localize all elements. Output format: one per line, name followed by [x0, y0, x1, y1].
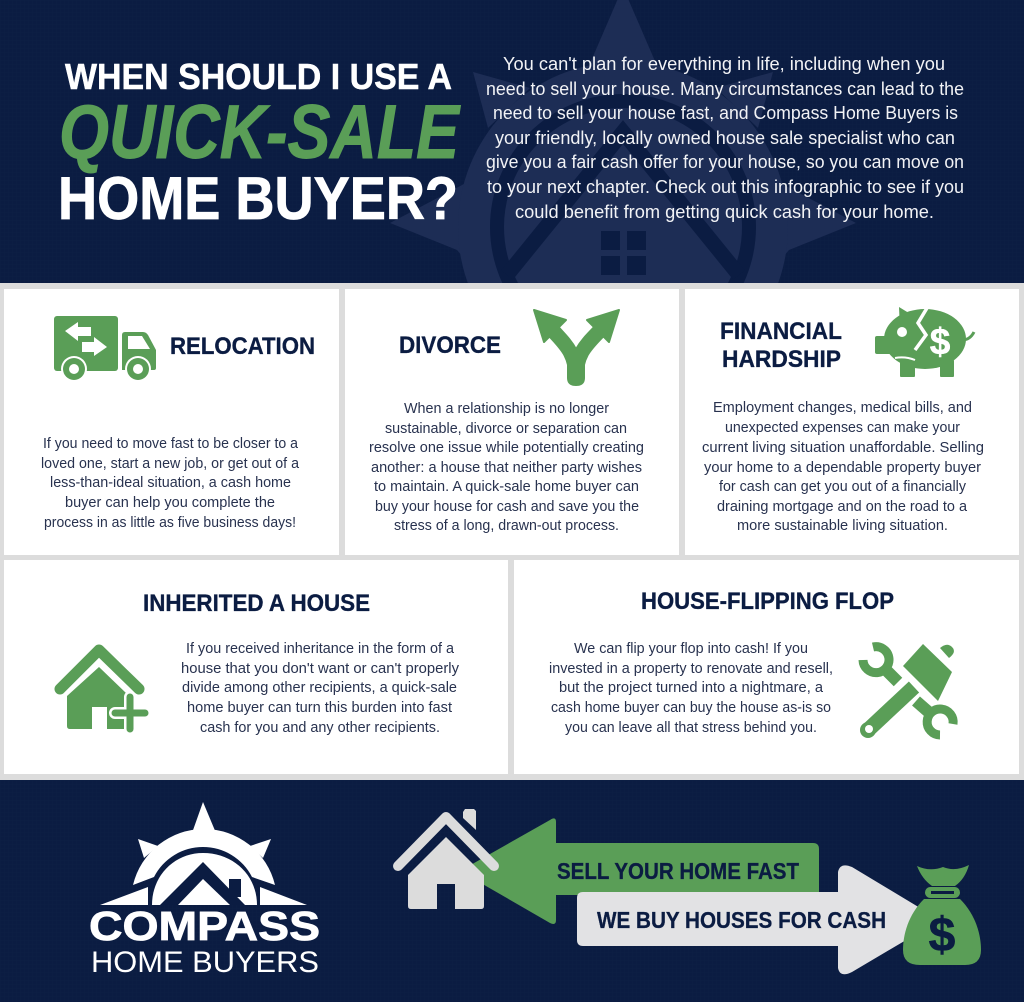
panel: relocation	[4, 289, 339, 555]
text: relocation: If you need to move fast to be closer to a	[43, 436, 299, 452]
icon: broken piggy bank	[875, 307, 974, 377]
text: relocation: process in as little as five business days!	[44, 515, 296, 531]
logo wordmark: HOME BUYERS	[91, 946, 319, 979]
text: house-flipping flop: We can flip your flop into cash! If you	[574, 641, 808, 657]
arrow: we buy houses for cash: WE BUY HOUSES FOR CASH	[597, 907, 886, 933]
text: divorce: stress of a long, drawn-out process.	[394, 518, 619, 534]
icon: money bag	[903, 865, 981, 965]
text: financial hardship	[702, 400, 984, 534]
heading: financial hardship: FINANCIAL	[720, 318, 842, 345]
title: HOME BUYER?	[58, 165, 458, 232]
text: divorce	[369, 401, 644, 534]
text: inherited a house: house that you don't want or can't properly	[181, 661, 460, 677]
text: inherited a house: If you received inheritance in the form of a	[186, 641, 455, 657]
title	[58, 56, 461, 232]
text: inherited a house: cash for you and any other recipients.	[200, 720, 440, 736]
intro paragraph: could benefit from getting quick cash for your home.	[515, 202, 934, 222]
text: inherited a house: divide among other recipients, a quick-sale	[182, 680, 457, 696]
text: inherited a house	[181, 641, 460, 736]
heading: financial hardship	[720, 318, 842, 373]
title: QUICK-SALE	[59, 90, 461, 175]
text: house-flipping flop: but the project turned into a nightmare, a	[559, 680, 824, 696]
heading: relocation: RELOCATION	[170, 333, 315, 360]
arrow: sell your home fast: SELL YOUR HOME FAST	[557, 858, 799, 884]
heading: house-flipping flop: HOUSE-FLIPPING FLOP	[641, 588, 894, 615]
intro paragraph: You can't plan for everything in life, including when you	[503, 54, 945, 74]
heading: financial hardship: HARDSHIP	[722, 346, 841, 373]
text: financial hardship: for cash can get you out of a financially	[719, 479, 967, 495]
icon: house with plus	[60, 650, 145, 729]
intro paragraph: give you a fair cash offer for your house, so you can move on	[486, 152, 964, 172]
text: financial hardship: unexpected expenses can make your	[725, 420, 960, 436]
text: financial hardship: your home to a dependable property buyer	[704, 460, 981, 476]
text: relocation: less-than-ideal situation, a cash home	[50, 475, 291, 491]
icon: moving truck	[54, 316, 156, 382]
intro paragraph	[486, 54, 964, 222]
text: relocation: loved one, start a new job, or get out of a	[41, 456, 300, 472]
text: relocation	[41, 436, 300, 531]
text: inherited a house: home buyer can turn this burden into fast	[187, 700, 452, 716]
text: house-flipping flop: cash home buyer can buy the house as-is so	[551, 700, 831, 716]
logo emblem	[100, 802, 307, 905]
footer banner	[0, 780, 1024, 1002]
logo wordmark	[89, 903, 320, 979]
icon: forked arrow	[534, 310, 619, 386]
logo: Compass Home Buyers	[89, 802, 320, 979]
logo wordmark: COMPASS	[89, 903, 320, 949]
text: divorce: sustainable, divorce or separation can	[385, 421, 627, 437]
panel: financial hardship	[685, 289, 1019, 555]
text: divorce: another: a house that neither party wishes	[371, 460, 642, 476]
icon: money bag: $	[929, 909, 956, 962]
arrow: we buy houses for cash	[577, 865, 940, 974]
text: financial hardship: more sustainable living situation.	[737, 518, 948, 534]
intro paragraph: to your next chapter. Check out this infographic to see if you	[487, 177, 964, 197]
intro paragraph: need to sell your house. Many circumstances can lead to the	[486, 79, 964, 99]
background compass emblem	[390, 0, 856, 283]
intro paragraph: need to sell your house fast, and Compass Home Buyers is	[493, 103, 958, 123]
icon: house	[398, 809, 494, 909]
panel: house-flipping flop	[514, 560, 1019, 774]
text: house-flipping flop: you can leave all that stress behind you.	[565, 720, 817, 736]
text: relocation: buyer can help you complete the	[65, 495, 275, 511]
text: divorce: buy your house for cash and save you the	[375, 499, 639, 515]
text: financial hardship: draining mortgage and on the road to a	[717, 499, 968, 515]
text: house-flipping flop: invested in a property to renovate and resell,	[549, 661, 833, 677]
panel: inherited a house	[4, 560, 508, 774]
arrow: sell your home fast	[460, 818, 819, 924]
intro paragraph: your friendly, locally owned house sale specialist who can	[495, 128, 955, 148]
text: divorce: When a relationship is no longer	[404, 401, 609, 417]
text: financial hardship: Employment changes, medical bills, and	[713, 400, 972, 416]
panel: divorce	[345, 289, 679, 555]
text: divorce: to maintain. A quick-sale home buyer can	[374, 479, 639, 495]
header banner	[0, 0, 1024, 283]
icon: broken piggy bank: $	[930, 321, 951, 362]
text: house-flipping flop	[549, 641, 833, 736]
text: financial hardship: current living situation unaffordable. Selling	[702, 440, 984, 456]
heading: inherited a house: INHERITED A HOUSE	[143, 590, 370, 617]
icon: hammer and wrench	[860, 644, 954, 738]
heading: divorce: DIVORCE	[399, 332, 501, 359]
text: divorce: resolve one issue while potentially creating	[369, 440, 644, 456]
title: WHEN SHOULD I USE A	[65, 56, 452, 97]
